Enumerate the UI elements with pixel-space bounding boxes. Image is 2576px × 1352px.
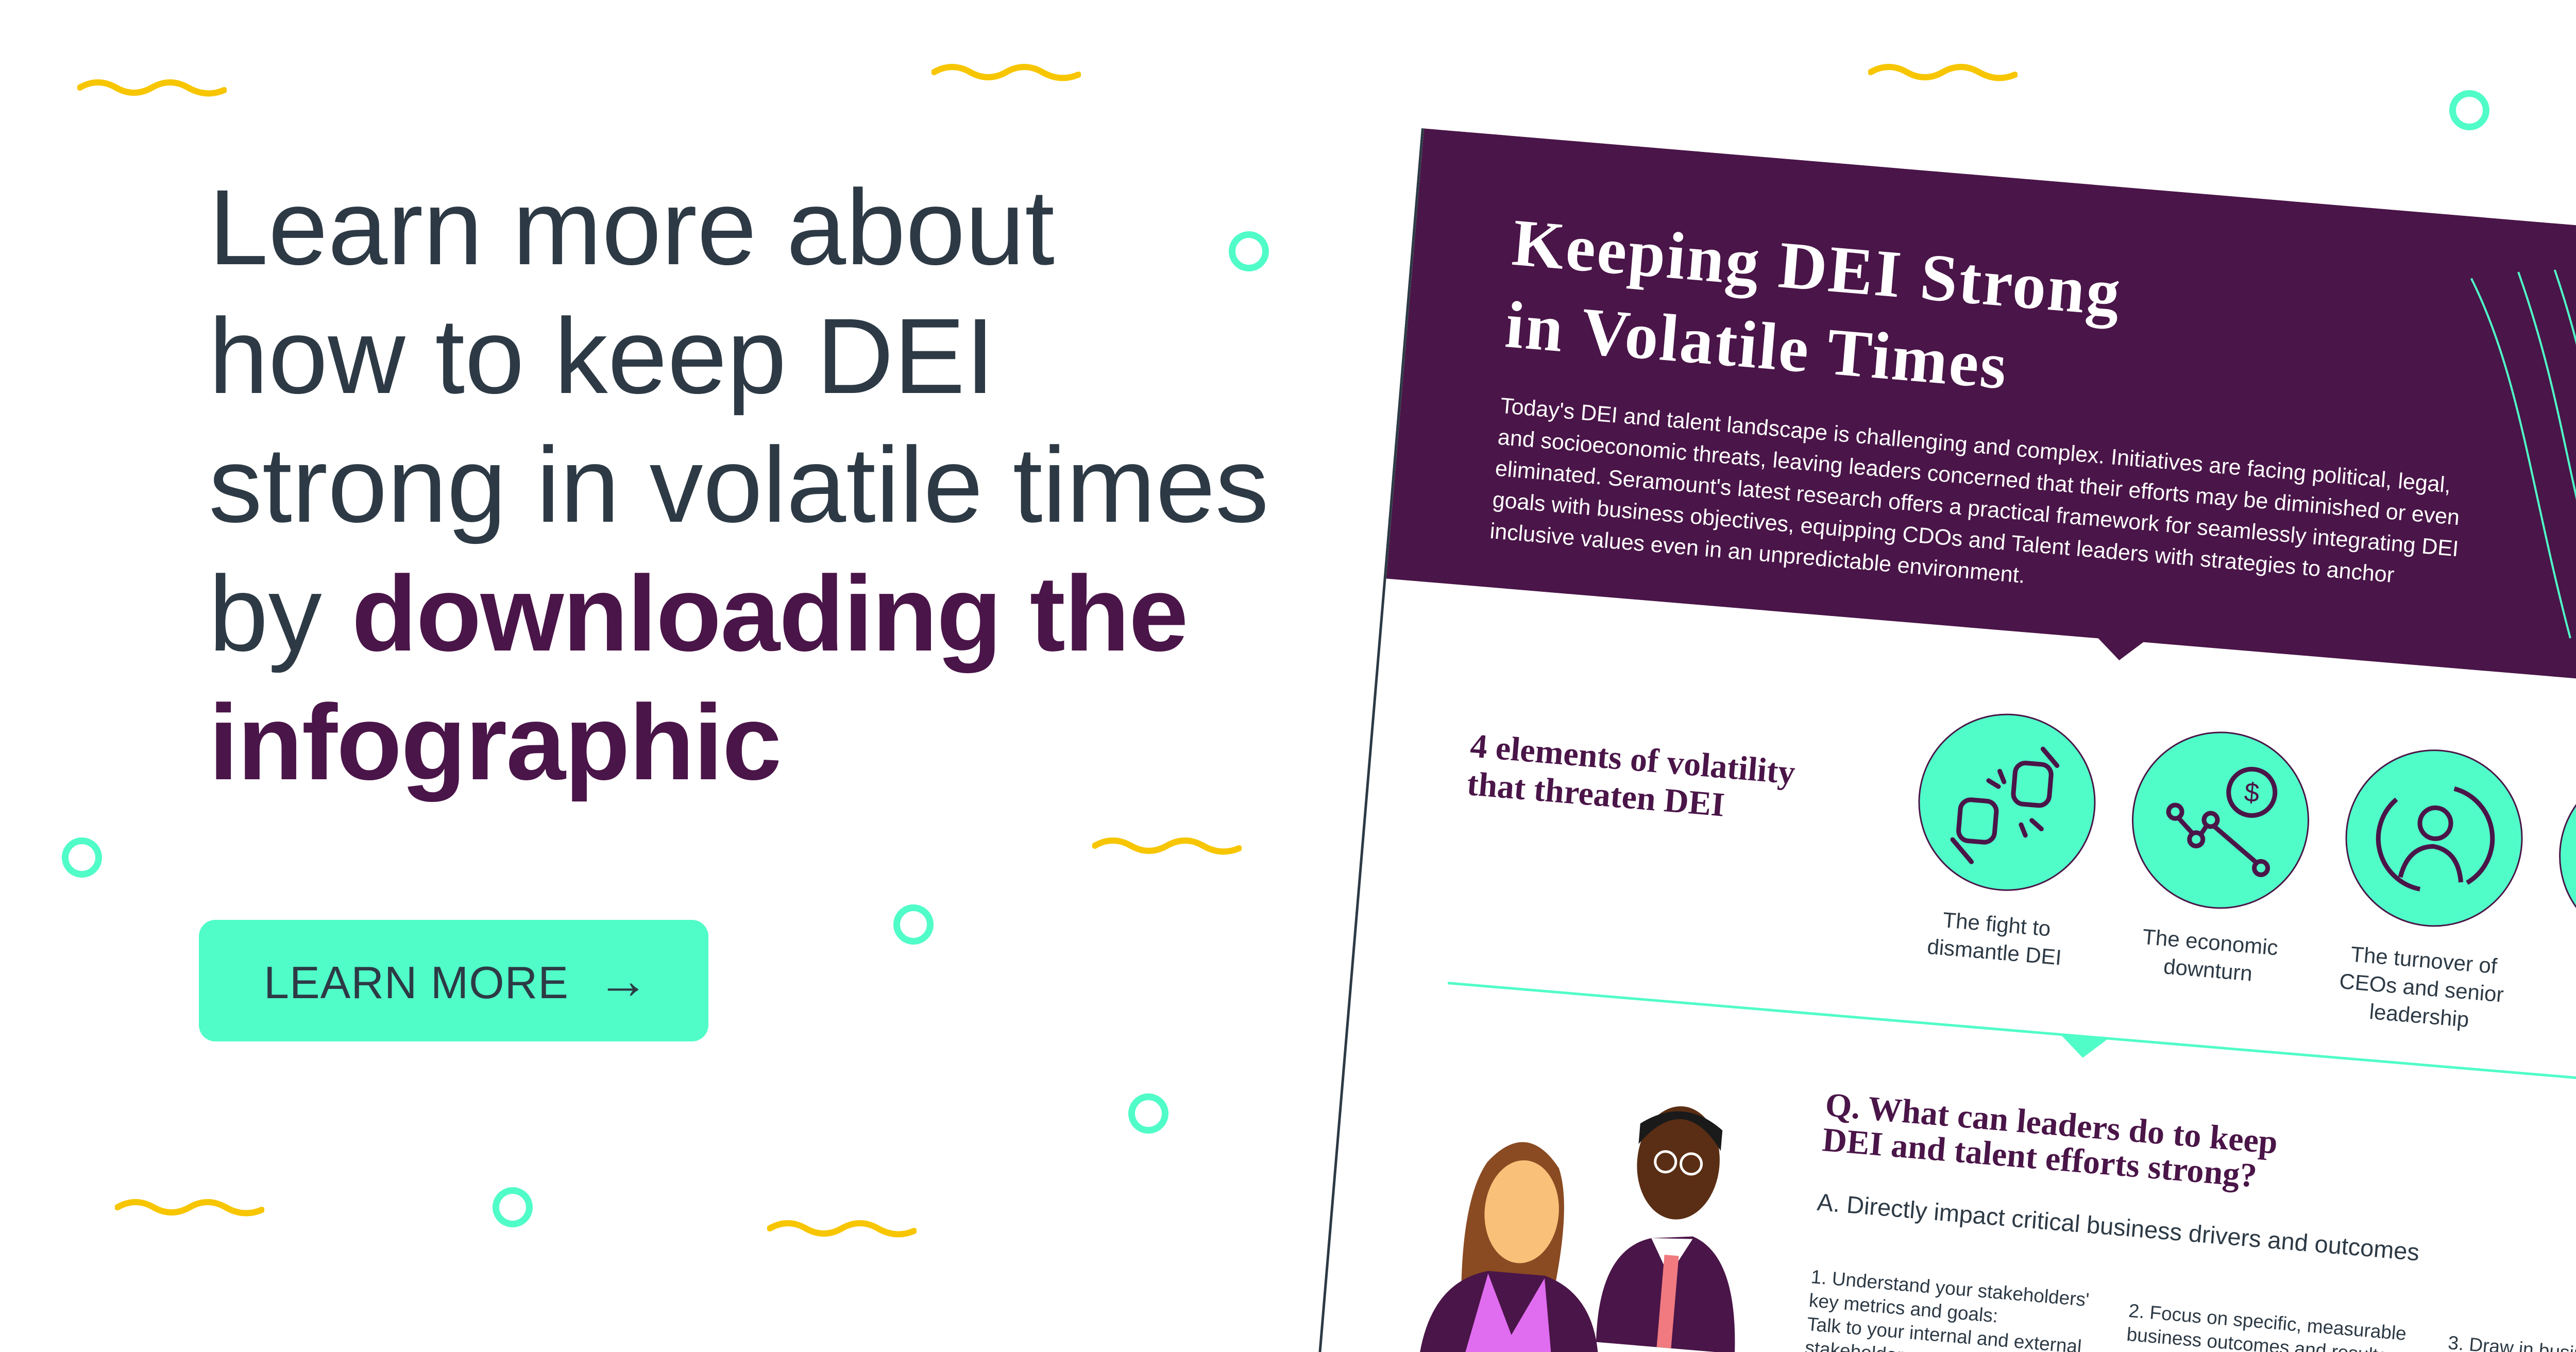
label: fight (1926, 908, 2062, 970)
section heading: 4 elements: 4 elements of volatility (1469, 727, 1797, 792)
question heading: DEI and talent efforts strong? (1821, 1121, 2258, 1195)
label: turnover: leadership (2368, 999, 2470, 1032)
headline text: by downloading the (209, 554, 1188, 674)
answer subheading: A. Directly impact critical business drivers and outcomes (1816, 1188, 2420, 1266)
headline text (209, 168, 1269, 802)
header panel (1386, 128, 2576, 691)
headline text: Learn more about (209, 168, 1055, 287)
title (1503, 206, 2125, 404)
intro paragraph: Today's DEI and talent landscape is challenging and complex. Initiatives are facing political, legal, and socioeconomic threats, leaving leaders concerned that their efforts may be diminished or even eliminated. Seramount's latest research offers a practical framework for seamlessly integrating DEI goals with business objectives, equipping CDOs and Talent leaders with strategies to anchor inclusive values even in an unpredictable environment. (1489, 393, 2461, 588)
section heading: 4 elements (1466, 727, 1797, 824)
question heading (1821, 1086, 2279, 1195)
label: economic downturn: downturn (2163, 954, 2253, 986)
headline text: how to keep DEI (209, 297, 995, 416)
title: Keeping DEI Strong (1510, 206, 2125, 331)
button: learn more: LEARN MORE → (264, 952, 649, 1009)
header pointer (2096, 638, 2144, 662)
label: turnover: The turnover of (2350, 942, 2498, 978)
column 1 (1804, 1266, 2090, 1352)
label: fight: The fight to (1942, 908, 2052, 941)
question heading: Q. What can leaders do to keep (1824, 1086, 2279, 1161)
icon: fist bump (1911, 707, 2103, 898)
button: learn more (199, 920, 708, 1041)
headline text: strong in volatile times (209, 425, 1269, 545)
label: economic downturn (2142, 925, 2279, 986)
illustration: two people (1420, 1106, 1735, 1352)
label: fight: dismantle DEI (1926, 934, 2062, 970)
icon: leadership turnover (2338, 743, 2530, 934)
label: turnover: CEOs and senior (2338, 969, 2504, 1007)
icon: downturn chart: $ (2243, 777, 2261, 809)
divider with pointer (1448, 982, 2576, 1079)
column 1: 1. Understand your stakeholders' key metrics and goals: (1808, 1266, 2090, 1327)
label: economic downturn: The economic (2142, 925, 2279, 960)
headline text: infographic (209, 683, 781, 802)
decorative teal lines (2470, 269, 2576, 639)
section heading: 4 elements: that threaten DEI (1466, 765, 1726, 824)
icon: fourth (partial) (2552, 760, 2576, 952)
title: in Volatile Times (1503, 287, 2011, 404)
label: turnover (2338, 942, 2504, 1032)
icon: downturn chart (2125, 725, 2316, 916)
